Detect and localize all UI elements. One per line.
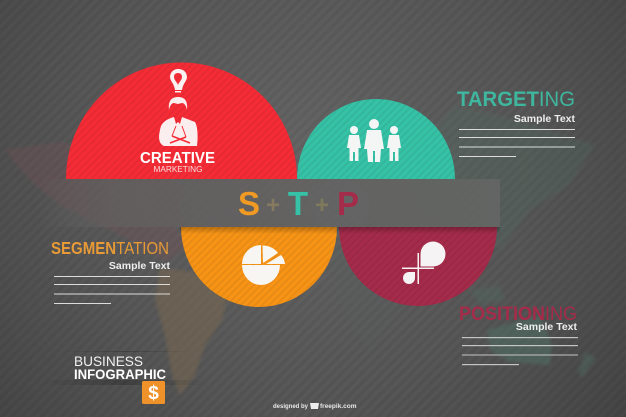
heading: T: T [288, 185, 308, 222]
text lines [54, 276, 170, 304]
icon: three people [347, 119, 401, 162]
positioning text [459, 304, 578, 365]
icon: businessman [159, 97, 198, 146]
center band [40, 179, 500, 227]
targeting text [457, 88, 576, 157]
icon: cross with drops [402, 242, 446, 284]
business infographic label [40, 351, 210, 404]
heading: targeting: TARGETING [457, 88, 575, 111]
text lines [462, 337, 578, 365]
heading: P: P [337, 185, 359, 222]
heading: positioning: POSITIONING [459, 304, 577, 325]
panel: targeting semicircle [297, 99, 455, 179]
sample text: Sample Text [516, 321, 578, 333]
panel: creative marketing semicircle [66, 62, 297, 179]
heading: creative: CREATIVE [140, 150, 215, 167]
plus 2: + [315, 192, 329, 219]
text: marketing: MARKETING [154, 165, 202, 174]
heading: segmentation: SEGMENTATION [51, 238, 169, 258]
icon: light bulb [170, 69, 187, 92]
footer credit: designed by [273, 404, 309, 410]
sample text: Sample Text [109, 260, 171, 272]
footer credit [273, 403, 357, 410]
icon: pie chart [242, 245, 285, 285]
panel: segmentation semicircle [181, 227, 337, 307]
heading: S: S [238, 185, 260, 222]
text lines [459, 129, 575, 157]
plus: + [266, 192, 280, 219]
world map [5, 105, 596, 395]
icon: dollar tag [142, 381, 165, 404]
footer credit: freepik.com [320, 403, 357, 410]
band shadow [180, 227, 500, 234]
icon: freepik [310, 403, 319, 409]
icon: dollar tag: $ [148, 383, 159, 404]
text: business: BUSINESS [74, 353, 143, 369]
text: infographic: INFOGRAPHIC [74, 366, 166, 382]
sample text: Sample Text [514, 113, 576, 125]
panel: positioning semicircle [339, 227, 497, 306]
segmentation text [51, 238, 171, 304]
